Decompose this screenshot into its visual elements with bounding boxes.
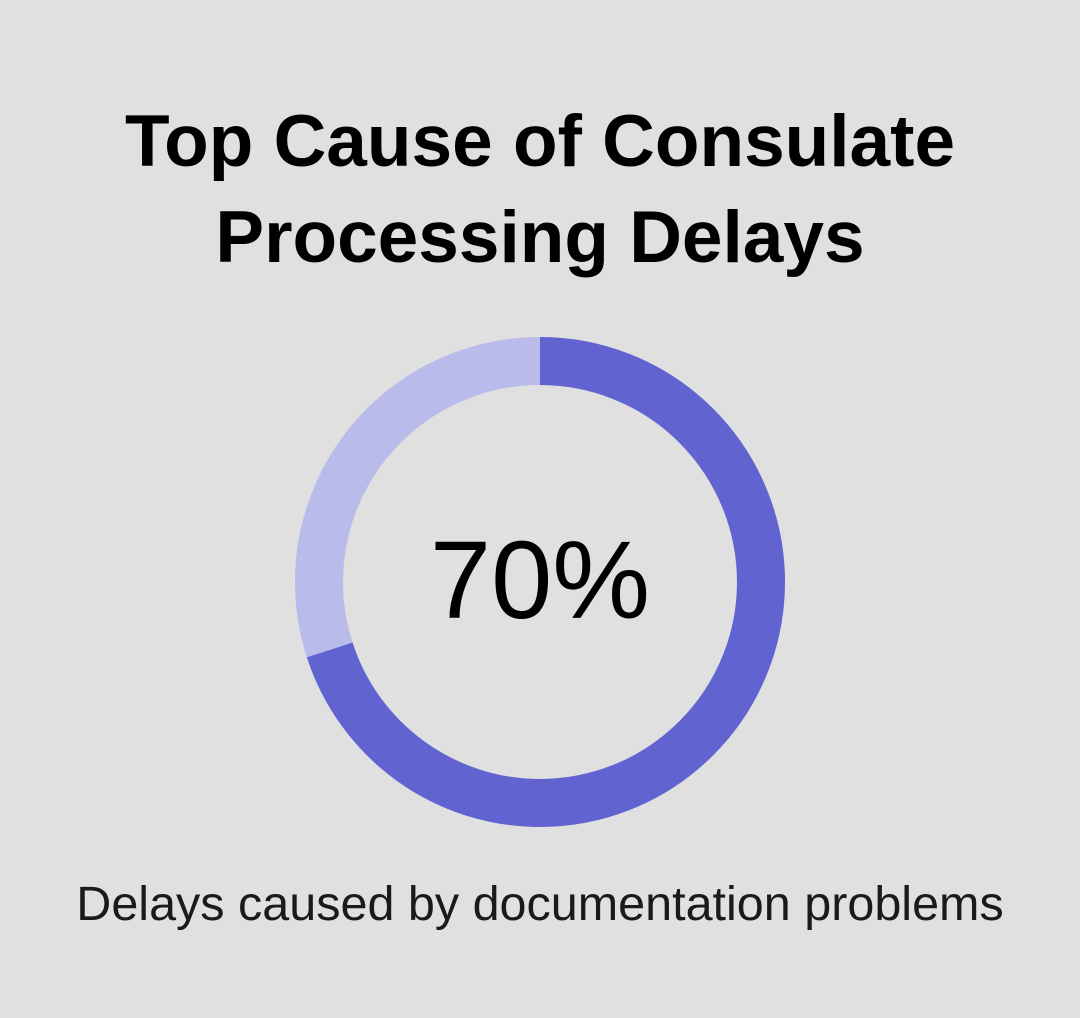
title xyxy=(125,101,955,278)
title: Processing Delays xyxy=(215,197,865,278)
ring value arc (70%) xyxy=(319,361,761,803)
title: Top Cause of Consulate xyxy=(125,101,955,182)
caption: Delays caused by documentation problems xyxy=(76,877,1004,931)
center value: 70% xyxy=(430,519,650,642)
ring background (remaining 30%) xyxy=(319,361,761,803)
